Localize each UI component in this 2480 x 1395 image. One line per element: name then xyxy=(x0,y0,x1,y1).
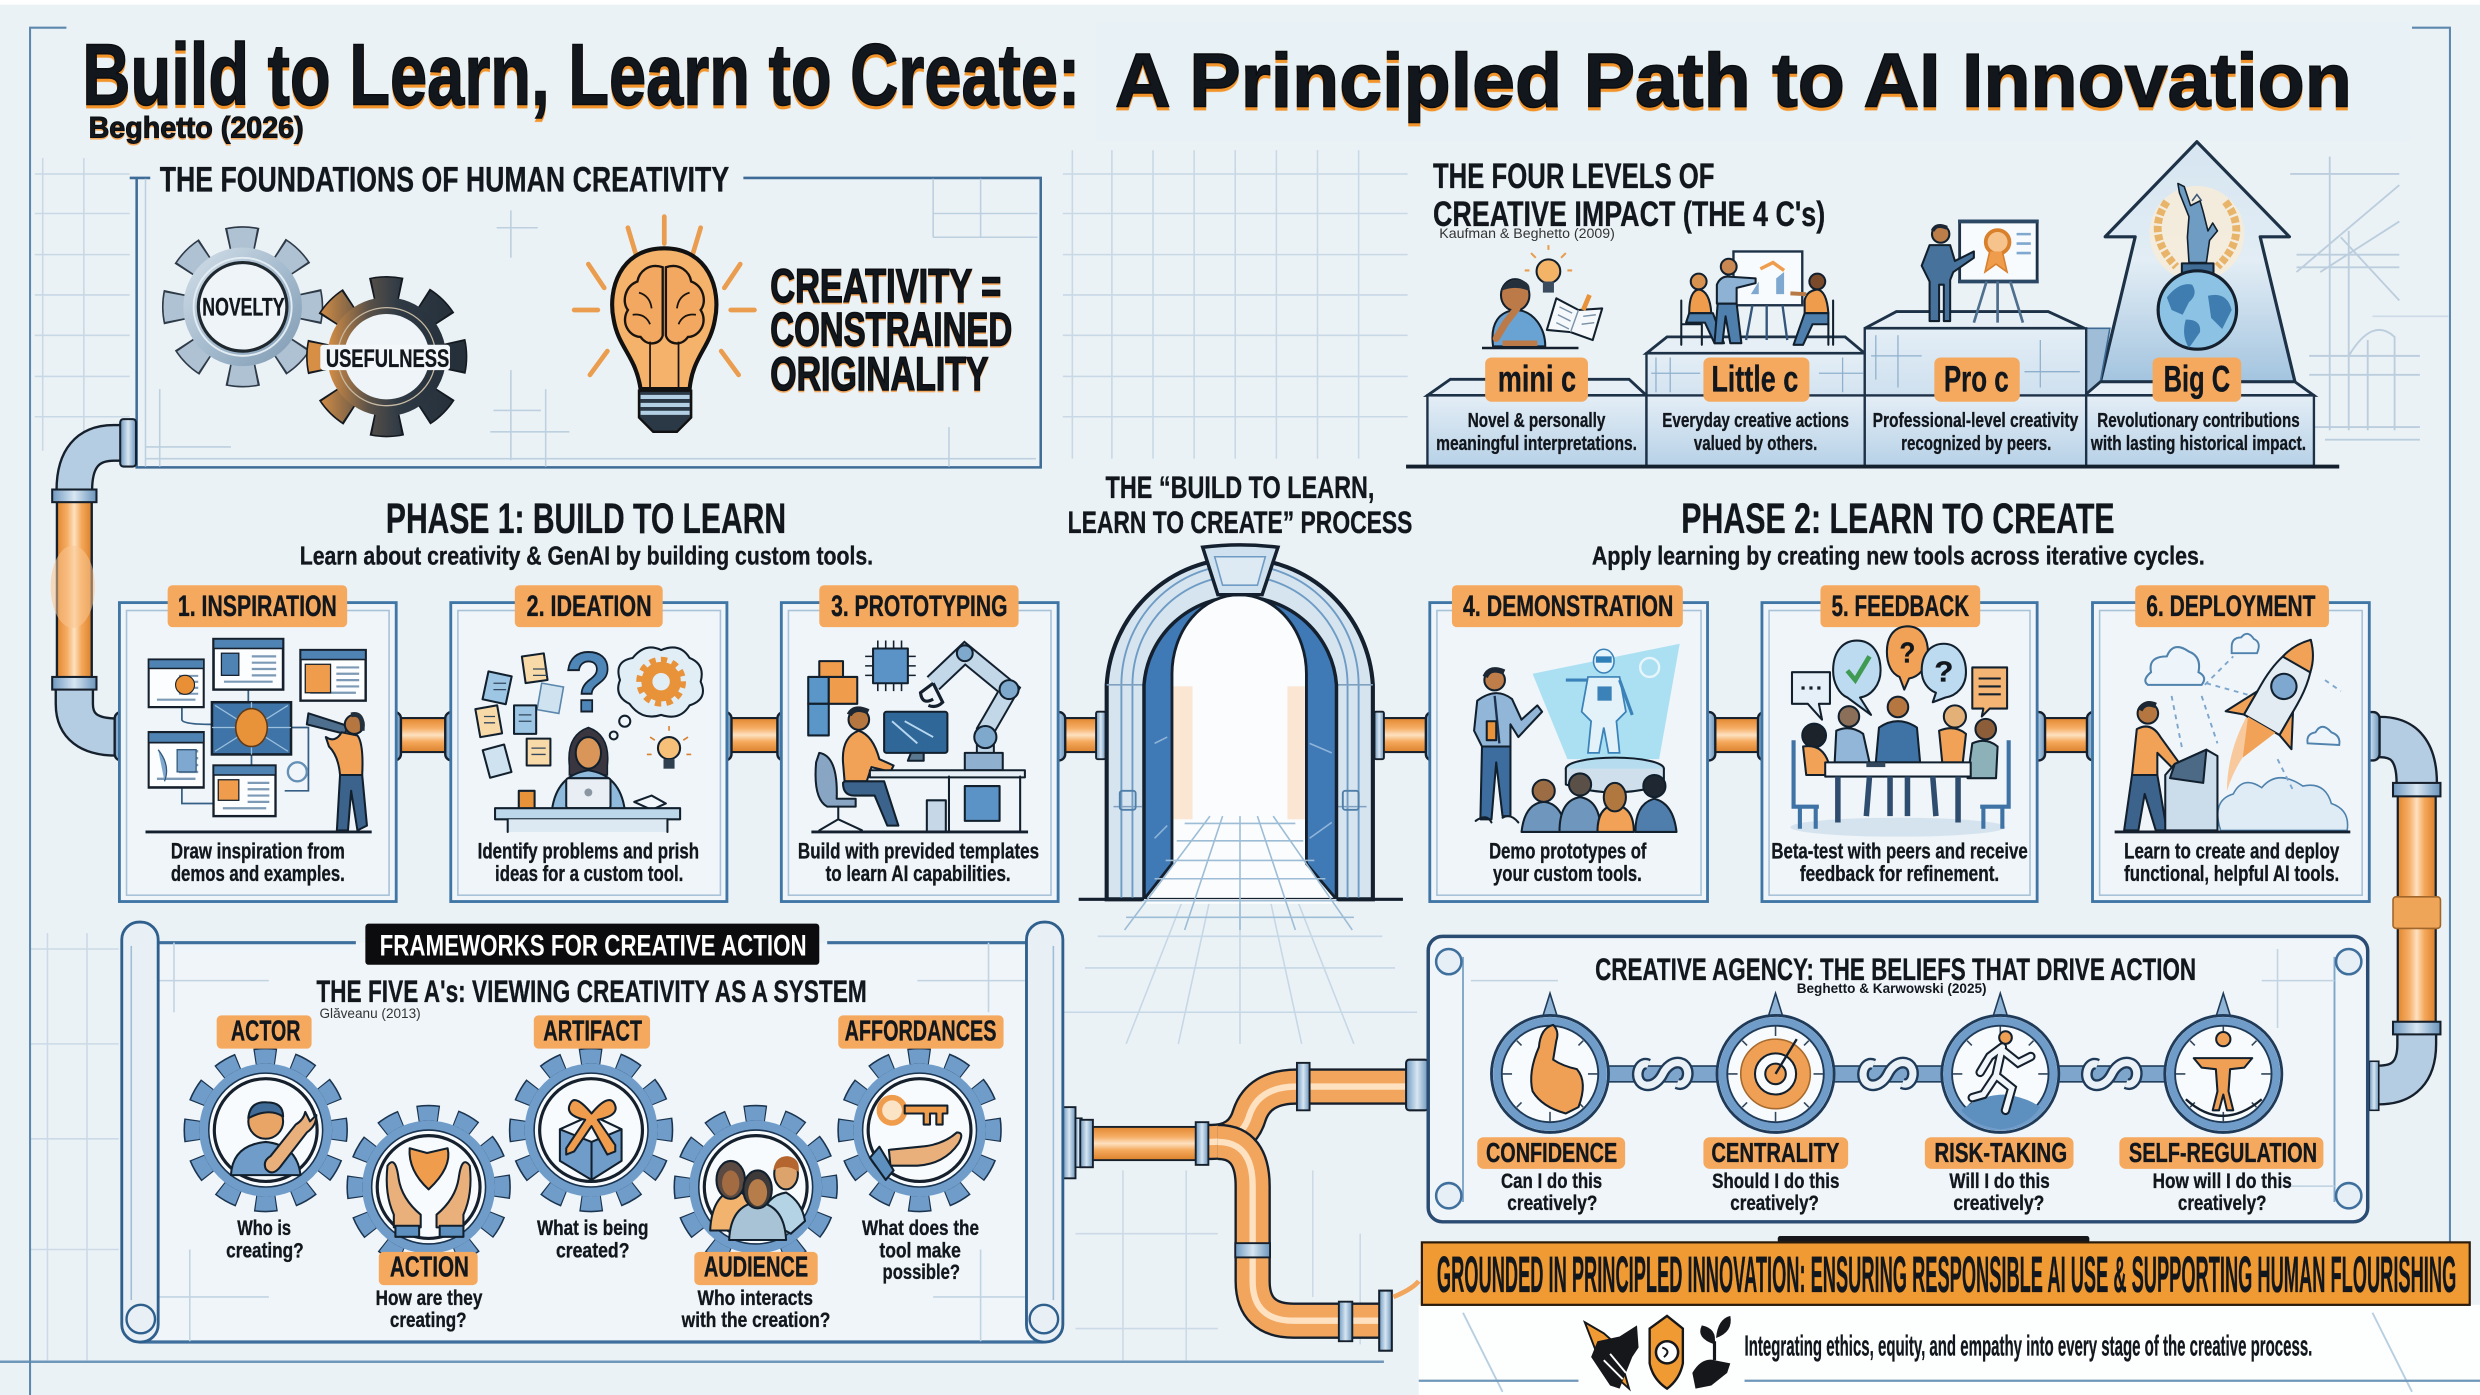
text: audience question: with the creation? xyxy=(681,1308,830,1332)
text: description: Learn to create and deploy xyxy=(2124,838,2340,863)
card 4: demonstration xyxy=(1430,585,1708,902)
text: mini c description: meaningful interpretations. xyxy=(1436,432,1637,455)
label: centrality: CENTRALITY xyxy=(1711,1137,1839,1168)
text: centrality question: creatively? xyxy=(1730,1191,1819,1215)
text: process title: LEARN TO CREATE” PROCESS xyxy=(1068,504,1412,540)
icon: shield xyxy=(1650,1316,1683,1389)
label: big c: Big C xyxy=(2164,357,2230,399)
text: pro c description: Professional-level creativity xyxy=(1873,409,2079,432)
white footer background xyxy=(1419,1305,2480,1395)
text: little c description: valued by others. xyxy=(1694,432,1817,455)
illustration: rocket launch console xyxy=(2115,621,2350,832)
title: build to learn: Build to Learn, Learn to Create: xyxy=(82,26,1080,123)
chain links between dials xyxy=(1607,1063,2167,1085)
icon: handshake xyxy=(1585,1322,1639,1389)
label: actor: ACTOR xyxy=(231,1016,301,1048)
author citation: Beghetto (2026) xyxy=(89,113,304,145)
text: centrality question: Should I do this xyxy=(1712,1169,1839,1193)
audience gear xyxy=(681,1113,830,1332)
text: description: functional, helpful AI tools. xyxy=(2124,861,2339,886)
citation: Kaufman & Beghetto (2009) xyxy=(1439,226,1615,241)
pipe connectors: process row xyxy=(380,712,2108,760)
text: description: feedback for refinement. xyxy=(1800,861,1999,886)
label: artifact: ARTIFACT xyxy=(543,1016,643,1048)
text: description xyxy=(1771,838,2028,886)
heading: phase 2: PHASE 2: LEARN TO CREATE xyxy=(1681,495,2115,543)
text: description: your custom tools. xyxy=(1493,861,1642,886)
icon: build-to-learn archway xyxy=(1063,545,1417,1044)
formula text xyxy=(770,260,1012,401)
affordances gear xyxy=(838,1015,1004,1284)
text: description: demos and examples. xyxy=(171,861,345,886)
icon: pro c presenter xyxy=(1922,221,2039,323)
formula text: ORIGINALITY xyxy=(770,348,989,401)
illustration: windows and telescope viewer xyxy=(146,639,372,832)
dial: self-regulation xyxy=(2119,993,2323,1215)
heading: THE FOUR LEVELS OF xyxy=(1433,156,1714,196)
label: affordances: AFFORDANCES xyxy=(845,1016,996,1048)
label: 6. deployment xyxy=(2135,585,2329,627)
panel: frameworks for creative action xyxy=(122,922,1063,1342)
text: actor question xyxy=(226,1216,304,1262)
label: 2. ideation: 2. IDEATION xyxy=(527,591,652,623)
formula text: CREATIVITY = xyxy=(770,260,1001,313)
text: description xyxy=(2124,838,2340,886)
text: description: Demo prototypes of xyxy=(1489,838,1647,863)
text: confidence question: Can I do this xyxy=(1501,1169,1602,1193)
illustration: feedback table with speech bubbles xyxy=(1790,626,2009,837)
heading: CREATIVE AGENCY: THE BELIEFS THAT DRIVE ACTION xyxy=(1595,951,2196,987)
title banner: second part background xyxy=(1096,22,2410,141)
icon: usefulness gear xyxy=(318,288,456,425)
label: frameworks black banner xyxy=(365,924,819,965)
label: little c: Little c xyxy=(1711,357,1798,399)
card 3: prototyping xyxy=(781,585,1058,902)
illustration: prototyping workstation with robot arm xyxy=(808,641,1028,832)
text: process title xyxy=(1068,469,1412,540)
heading xyxy=(1433,156,1825,234)
stair steps xyxy=(1406,312,2339,467)
artifact gear xyxy=(518,1015,665,1262)
phase 1 subtitle: Learn about creativity & GenAI by building custom tools. xyxy=(300,541,873,571)
text: description: ideas for a custom tool. xyxy=(495,861,683,886)
card 1: inspiration xyxy=(119,585,396,902)
title: principled path: A Principled Path to AI Innovation xyxy=(1115,39,2352,124)
heading: five a's: THE FIVE A's: VIEWING CREATIVITY AS A SYSTEM xyxy=(316,973,867,1009)
text: self-regulation question: How will I do this xyxy=(2153,1169,2292,1193)
label: mini c: mini c xyxy=(1498,357,1576,399)
label: actor xyxy=(217,1015,312,1049)
pipe: upper left from foundations to phase 1 xyxy=(51,419,136,760)
text: self-regulation question xyxy=(2153,1169,2292,1215)
card 6: deployment xyxy=(2092,585,2369,902)
label: pro c: Pro c xyxy=(1944,357,2009,399)
icon: statue of liberty on globe with laurels xyxy=(2149,183,2244,349)
text: description: to learn AI capabilities. xyxy=(826,861,1011,886)
text: audience question xyxy=(681,1286,830,1332)
label: audience xyxy=(694,1251,818,1285)
text: process title: THE “BUILD TO LEARN, xyxy=(1106,469,1374,505)
text: risk-taking question: creatively? xyxy=(1953,1191,2044,1215)
pipe: lower branching connector xyxy=(1063,1060,1428,1351)
text: description xyxy=(1489,838,1647,886)
actor gear xyxy=(192,1015,339,1262)
label: 5. feedback xyxy=(1820,585,1980,627)
citation: Beghetto & Karwowski (2025) xyxy=(1797,981,1987,996)
text: artifact question: What is being xyxy=(537,1216,648,1240)
heading: phase 2 xyxy=(1592,495,2205,571)
icon: lightbulb with brain xyxy=(574,217,754,432)
text: description: Build with previded templates xyxy=(798,838,1039,863)
label: 3. prototyping xyxy=(819,585,1019,627)
dial: centrality xyxy=(1703,993,1848,1215)
label: self-regulation: SELF-REGULATION xyxy=(2129,1137,2317,1168)
pipe: right side from phase 2 down to creative agency xyxy=(2359,712,2440,1110)
illustration: ideation desk and notes xyxy=(475,636,703,832)
illustration: presenter with hologram robot xyxy=(1474,644,1680,832)
card 2: ideation xyxy=(451,585,727,902)
text: centrality question xyxy=(1712,1169,1839,1215)
panel: foundations of human creativity xyxy=(130,159,1041,467)
heading: THE FOUNDATIONS OF HUMAN CREATIVITY xyxy=(160,159,729,199)
text: actor question: creating? xyxy=(226,1238,304,1262)
icon: usefulness gear: USEFULNESS xyxy=(326,346,449,373)
heading: CREATIVE IMPACT (THE 4 C's) xyxy=(1433,194,1825,234)
formula text: CONSTRAINED xyxy=(770,304,1012,357)
action gear xyxy=(355,1113,502,1332)
label: 2. ideation xyxy=(515,585,663,627)
dial: confidence xyxy=(1477,993,1625,1215)
text: affordances question: tool make xyxy=(879,1238,961,1262)
label: 3. prototyping: 3. PROTOTYPING xyxy=(831,591,1008,623)
text: description xyxy=(798,838,1039,886)
text: little c description xyxy=(1662,409,1849,455)
text: description: Draw inspiration from xyxy=(171,838,345,863)
text: affordances question: possible? xyxy=(883,1260,960,1284)
text: audience question: Who interacts xyxy=(698,1286,813,1310)
label: 1. inspiration: 1. INSPIRATION xyxy=(178,591,337,623)
text: mini c description: Novel & personally xyxy=(1468,409,1606,432)
text: mini c description xyxy=(1436,409,1637,455)
text: risk-taking question: Will I do this xyxy=(1949,1169,2050,1193)
label: action: ACTION xyxy=(390,1251,469,1283)
label: 4. demonstration xyxy=(1452,585,1683,627)
text: description xyxy=(478,838,699,886)
panel: principled innovation footer xyxy=(1419,1236,2480,1395)
text: affordances question: What does the xyxy=(862,1216,979,1240)
black tab xyxy=(1778,1236,2089,1243)
heading: phase 1 xyxy=(300,495,873,571)
icon: mini c thinker xyxy=(1482,245,1602,348)
card 5: feedback xyxy=(1762,585,2037,902)
heading: phase 1: PHASE 1: BUILD TO LEARN xyxy=(386,495,786,543)
illustration: ideation desk and notes: ? xyxy=(565,636,612,731)
text: pro c description: recognized by peers. xyxy=(1901,432,2051,455)
text: little c description: Everyday creative actions xyxy=(1662,409,1849,432)
text: pro c description xyxy=(1873,409,2079,455)
illustration: feedback table with speech bubbles: ? xyxy=(1900,638,1915,670)
text: action question: How are they xyxy=(376,1286,482,1310)
citation: Glăveanu (2013) xyxy=(319,1006,421,1021)
icon: novelty gear: NOVELTY xyxy=(202,295,285,322)
label: risk-taking: RISK-TAKING xyxy=(1934,1137,2067,1168)
label: 6. deployment: 6. DEPLOYMENT xyxy=(2146,591,2316,623)
text: confidence question xyxy=(1501,1169,1602,1215)
label: 4. demonstration: 4. DEMONSTRATION xyxy=(1463,591,1673,623)
title xyxy=(82,26,2352,124)
label: audience: AUDIENCE xyxy=(704,1251,808,1283)
icon: sprout in hand xyxy=(1692,1316,1731,1389)
text: action question xyxy=(376,1286,482,1332)
phase 2 subtitle: Apply learning by creating new tools across iterative cycles. xyxy=(1592,541,2205,571)
dial: risk-taking xyxy=(1925,993,2074,1215)
arrow: big c upward arrow xyxy=(2100,142,2295,382)
text: artifact question xyxy=(537,1216,648,1262)
icon: novelty gear xyxy=(174,238,311,376)
label: frameworks black banner: FRAMEWORKS FOR CREATIVE ACTION xyxy=(380,929,807,962)
text: self-regulation question: creatively? xyxy=(2178,1191,2266,1215)
panel: creative agency xyxy=(1428,936,2368,1222)
illustration: feedback table with speech bubbles: ? xyxy=(1934,657,1953,689)
text: actor question: Who is xyxy=(237,1216,291,1240)
text: artifact question: created? xyxy=(556,1238,629,1262)
text: description: Identify problems and prish xyxy=(478,838,699,863)
label: 5. feedback: 5. FEEDBACK xyxy=(1832,591,1969,623)
label: big c xyxy=(2153,357,2241,402)
text: description xyxy=(171,838,345,886)
text: description: Beta-test with peers and receive xyxy=(1771,838,2028,863)
text: risk-taking question xyxy=(1949,1169,2050,1215)
icon: little c group at board xyxy=(1681,251,1833,345)
text: action question: creating? xyxy=(390,1308,467,1332)
label: confidence: CONFIDENCE xyxy=(1486,1137,1617,1168)
text: affordances question xyxy=(862,1216,979,1284)
panel: four levels of creative impact xyxy=(1406,142,2339,467)
text: big c description: Revolutionary contributions xyxy=(2097,409,2300,432)
text: confidence question: creatively? xyxy=(1507,1191,1597,1215)
label: artifact xyxy=(534,1015,650,1049)
text: big c description xyxy=(2090,409,2306,455)
label: affordances xyxy=(838,1015,1004,1049)
text: big c description: with lasting historical impact. xyxy=(2090,432,2306,455)
label: 1. inspiration xyxy=(168,585,347,627)
